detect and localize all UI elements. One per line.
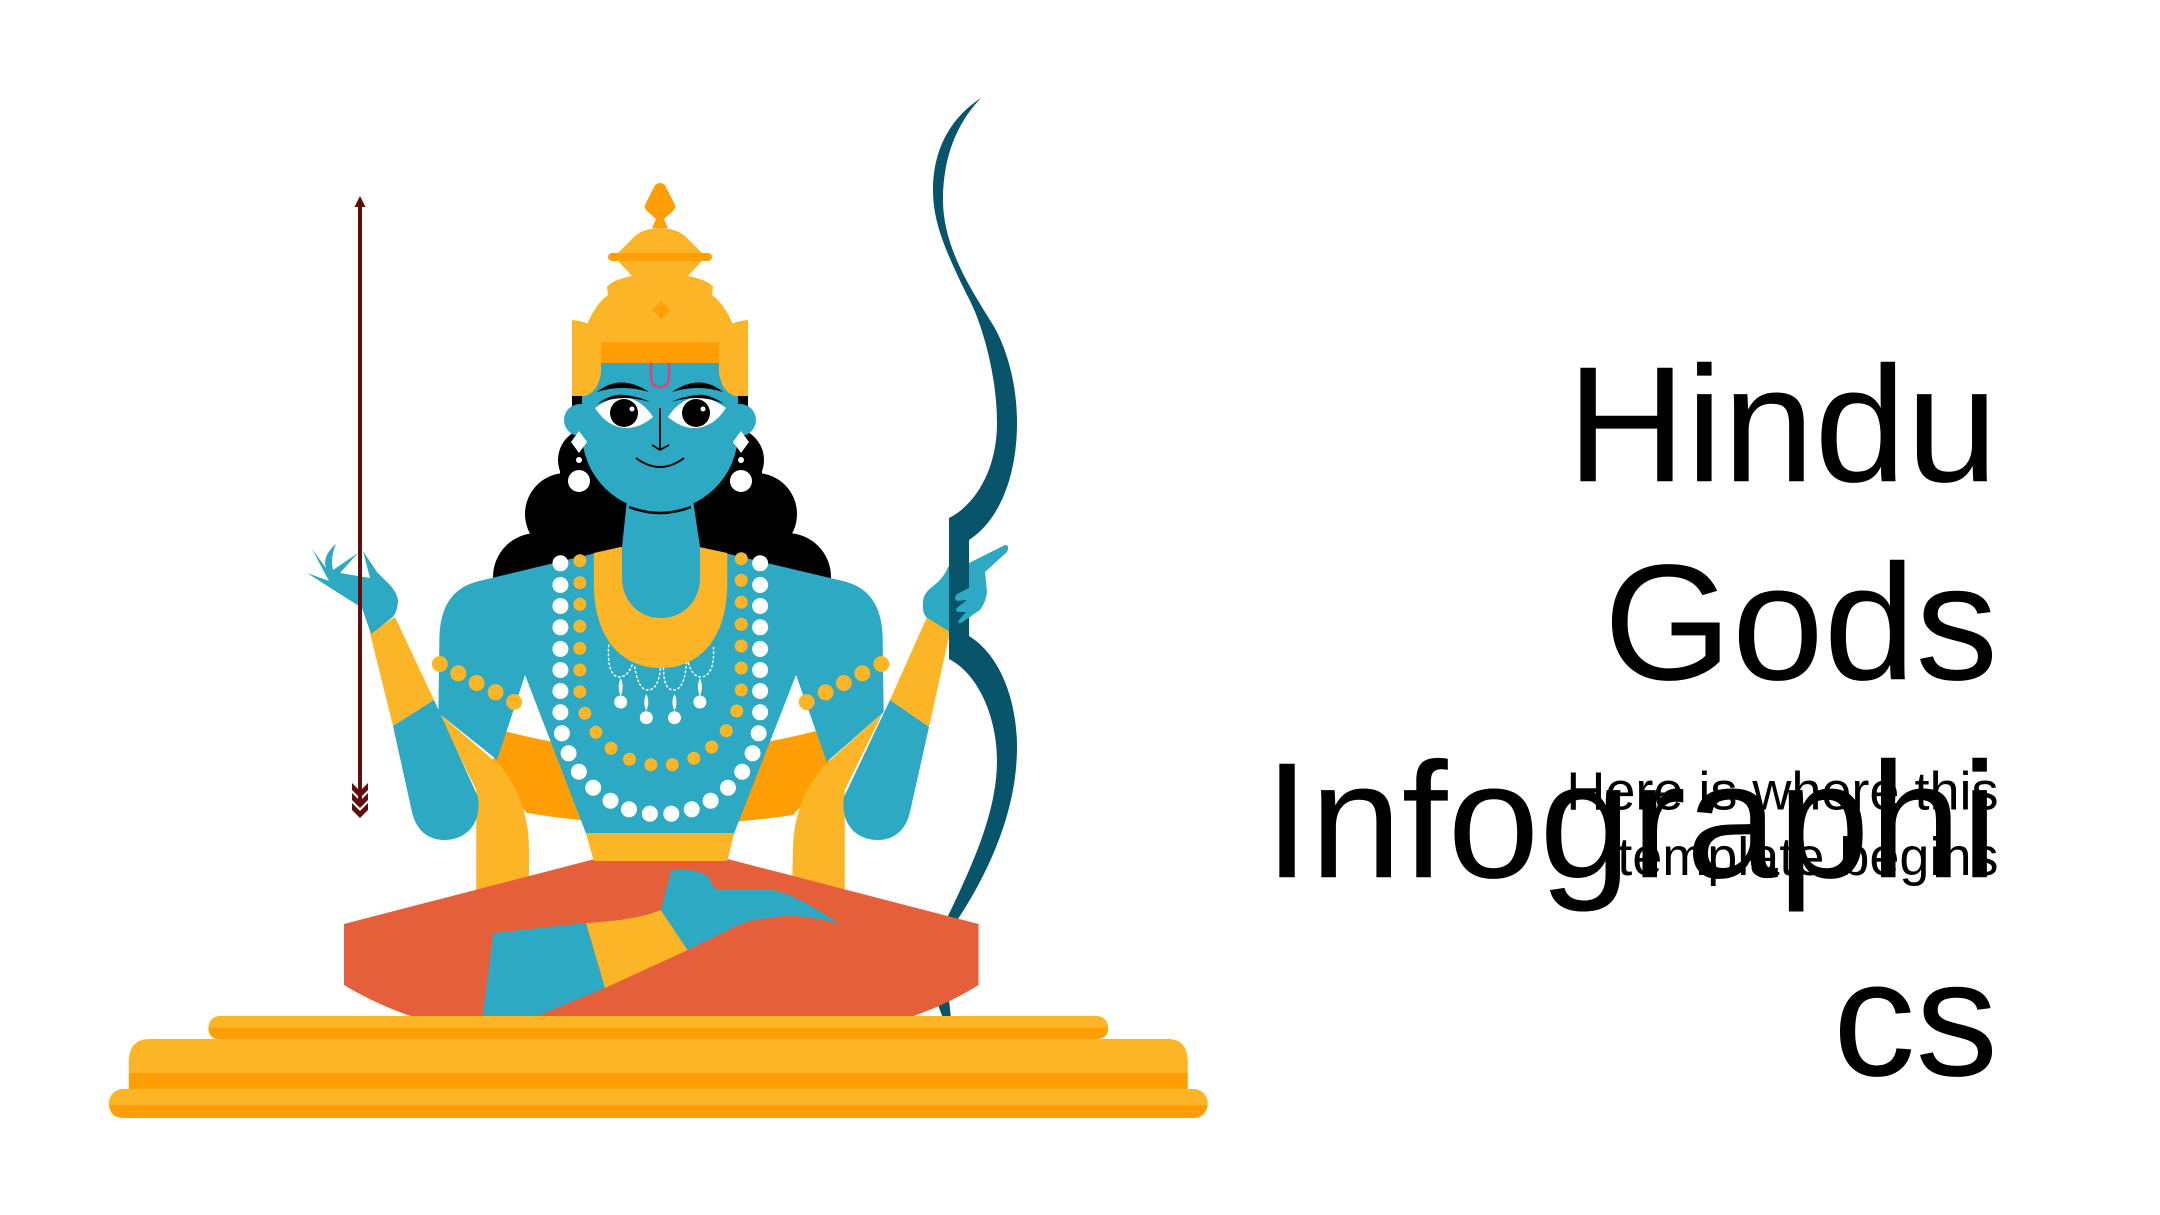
- title: [1264, 332, 1998, 1110]
- subtitle: template begins: [1617, 827, 1998, 887]
- earrings: [568, 431, 752, 492]
- right armlet beads: [799, 656, 889, 710]
- lotus lap: [344, 859, 979, 1018]
- title: Hindu: [1567, 332, 1998, 516]
- crown: [572, 183, 748, 396]
- bow: [933, 98, 1017, 919]
- right hand fingers: [955, 545, 1008, 623]
- platform top step: [209, 1016, 1108, 1039]
- tilak: [651, 363, 669, 387]
- waist band: [586, 833, 734, 861]
- neck: [622, 500, 700, 618]
- eyes: [595, 395, 726, 428]
- platform: [109, 1016, 1208, 1118]
- hair: [493, 396, 831, 621]
- bow lower tip: [936, 1000, 951, 1018]
- title: cs: [1833, 926, 1998, 1110]
- dotted pendant necklace: [608, 645, 714, 724]
- gold bead necklace: [573, 552, 748, 771]
- nose: [652, 408, 669, 450]
- title: Gods: [1604, 530, 1998, 714]
- smile: [636, 458, 684, 467]
- pearl necklace: [552, 555, 768, 822]
- left arm: [307, 544, 479, 840]
- illustration: seated blue deity: [307, 98, 1017, 1018]
- platform middle step: [129, 1039, 1188, 1089]
- title: Infographi: [1264, 728, 1998, 912]
- platform bottom step: [109, 1089, 1208, 1118]
- right arm: [843, 560, 960, 840]
- subtitle: Here is where this: [1566, 762, 1998, 822]
- legs: hips and thighs: [438, 713, 883, 905]
- chin line: [629, 507, 691, 513]
- collar: [594, 547, 727, 668]
- face and ears: [564, 363, 756, 511]
- torso and upper arms: [438, 547, 884, 833]
- waist sash behind body: [489, 731, 833, 825]
- arrow: [352, 196, 368, 818]
- eyebrows: [597, 382, 723, 392]
- left armlet beads: [432, 656, 522, 710]
- subtitle: [1566, 762, 1998, 887]
